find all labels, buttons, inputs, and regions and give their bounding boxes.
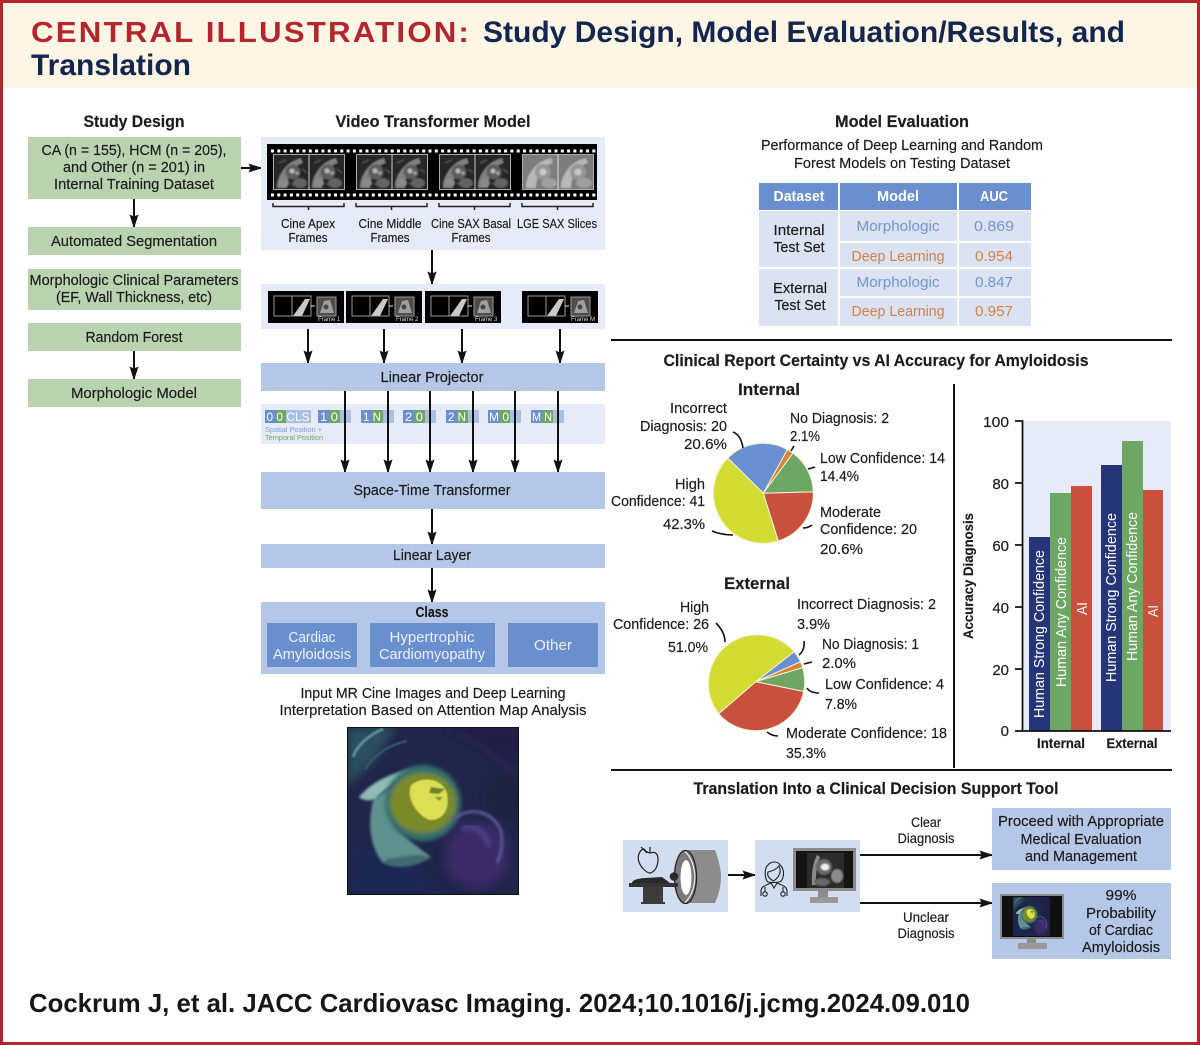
label: clear diagnosis: Clear xyxy=(911,815,941,830)
image: attention map xyxy=(347,727,527,895)
box: morphologic clinical parameters: Morphologic Clinical Parameters xyxy=(30,273,238,289)
heading: model evaluation: Model Evaluation xyxy=(835,112,969,131)
box: random forest: Random Forest xyxy=(86,330,182,346)
pie chart: internal: Low Confidence: 14 xyxy=(820,451,945,467)
bar chart: accuracy diagnosis xyxy=(960,414,1171,751)
pie chart: internal: Internal xyxy=(738,380,800,399)
pie chart: internal: High xyxy=(675,477,705,493)
box: training dataset: Internal Training Dataset xyxy=(54,177,214,193)
title: CENTRAL ILLUSTRATION: xyxy=(31,17,471,49)
pie chart: internal: 42.3% xyxy=(663,517,705,533)
box: probability of cardiac amyloidosis: Probability xyxy=(1086,906,1157,922)
box: morphologic model: Morphologic Model xyxy=(71,386,197,402)
arrow: linear layer to class xyxy=(431,568,433,602)
heading: clinical report certainty: Clinical Report Certainty vs AI Accuracy for Amyloidosis xyxy=(664,351,1088,370)
pie chart: internal: Moderate xyxy=(820,505,881,521)
caption: attention map: Input MR Cine Images and Deep Learning xyxy=(300,686,566,702)
frames panel: Frame M xyxy=(571,317,595,323)
table: AUC: External xyxy=(773,281,827,297)
table: AUC: Test Set xyxy=(774,298,826,314)
panel: study design xyxy=(28,112,241,407)
heading: study design: Study Design xyxy=(84,112,184,131)
subheading: performance xyxy=(761,138,1043,172)
film strip panel: LGE SAX Slices xyxy=(517,217,597,231)
class: cardiac amyloidosis xyxy=(267,623,357,667)
arrows: frames to linear projector xyxy=(308,329,560,363)
table: AUC: 0.954 xyxy=(975,249,1013,265)
position tokens band: M 0 xyxy=(489,410,509,424)
box: morphologic clinical parameters: (EF, Wall Thickness, etc) xyxy=(56,290,212,306)
arrow: MRI to clinician xyxy=(728,874,755,876)
panel: translation xyxy=(623,779,1171,959)
icon: clinician with monitor xyxy=(755,840,860,912)
box: training dataset: and Other (n = 201) in xyxy=(63,160,205,176)
box: probability of cardiac amyloidosis: of Cardiac xyxy=(1089,923,1153,939)
label: unclear diagnosis: Diagnosis xyxy=(898,926,955,941)
class: hypertrophic cardiomyopathy: Hypertrophic xyxy=(390,630,474,646)
arrow: clear diagnosis xyxy=(860,854,992,856)
subheading: performance: Forest Models on Testing Dataset xyxy=(794,156,1010,172)
box: proceed with evaluation xyxy=(992,808,1171,870)
arrow: unclear diagnosis xyxy=(860,902,992,904)
table: AUC: 0.957 xyxy=(975,304,1013,320)
table: AUC: Deep Learning xyxy=(852,304,944,320)
box: proceed with evaluation: Medical Evaluation xyxy=(1020,832,1142,848)
pie chart: external: 7.8% xyxy=(825,697,857,713)
pie chart: external: High xyxy=(680,600,709,616)
bar chart: accuracy diagnosis: 40 xyxy=(992,600,1009,617)
pie chart: internal: 20.6% xyxy=(820,542,863,558)
box: probability of cardiac amyloidosis: 99% xyxy=(1106,888,1137,904)
title: Translation xyxy=(31,49,191,82)
bars: internal: Human Any Confidence xyxy=(1053,537,1070,687)
arrows: projector to transformer xyxy=(345,391,558,472)
bar chart: accuracy diagnosis: External xyxy=(1106,736,1158,751)
film strip panel: Frames xyxy=(370,231,410,245)
pie chart: internal: Confidence: 41 xyxy=(611,494,705,510)
icon: monitor with attention map xyxy=(1000,894,1064,949)
arrow: random forest to model xyxy=(133,351,135,379)
box: automated segmentation xyxy=(28,227,241,255)
table: AUC: Deep Learning xyxy=(852,249,944,265)
box: linear projector: Linear Projector xyxy=(380,370,484,386)
class: hypertrophic cardiomyopathy: Cardiomyopathy xyxy=(379,647,486,663)
position tokens band: Spatial Position + xyxy=(265,427,322,434)
pie chart: internal: 2.1% xyxy=(790,429,820,445)
panel: model evaluation xyxy=(759,112,1043,326)
box: class xyxy=(261,602,605,674)
bar chart: accuracy diagnosis: 100 xyxy=(983,414,1009,431)
table: AUC: 0.847 xyxy=(975,275,1013,291)
arrow: film strip to frames xyxy=(431,250,433,284)
heading: translation: Translation Into a Clinical Decision Support Tool xyxy=(694,779,1058,798)
box: morphologic model xyxy=(28,379,241,407)
bar chart: accuracy diagnosis: 80 xyxy=(992,476,1009,493)
table: AUC xyxy=(759,183,1031,326)
title: Study Design, Model Evaluation/Results, and xyxy=(483,16,1125,49)
pie chart: external: Low Confidence: 4 xyxy=(825,677,944,693)
class: hypertrophic cardiomyopathy xyxy=(370,623,495,667)
box: space-time transformer xyxy=(261,472,605,509)
table: AUC: Dataset xyxy=(774,189,825,205)
table: AUC: Test Set xyxy=(774,240,824,256)
pie chart: external xyxy=(613,574,947,762)
bars: external: Human Any Confidence xyxy=(1124,512,1141,661)
film strip panel: Frames xyxy=(288,231,328,245)
position tokens band: 1 N xyxy=(363,410,381,424)
film strip panel: Cine Apex xyxy=(281,217,336,231)
panel: video transformer model xyxy=(261,112,605,895)
table: AUC: Morphologic xyxy=(856,275,940,291)
pie chart: external: Moderate Confidence: 18 xyxy=(786,726,947,742)
pie chart: external: No Diagnosis: 1 xyxy=(822,637,919,653)
bars: external: AI xyxy=(1145,605,1162,617)
bars: external: Human Strong Confidence xyxy=(1103,513,1120,682)
film strip panel: Cine SAX Basal xyxy=(431,217,511,231)
class: cardiac amyloidosis: Cardiac xyxy=(288,630,336,646)
frames panel xyxy=(261,284,605,329)
position tokens band xyxy=(261,404,605,444)
box: automated segmentation: Automated Segmentation xyxy=(51,234,217,250)
box: probability of cardiac amyloidosis xyxy=(992,883,1171,959)
pie chart: internal: Diagnosis: 20 xyxy=(640,419,727,435)
class: other xyxy=(508,623,598,667)
heading: video transformer model: Video Transformer Model xyxy=(336,112,530,131)
label: clear diagnosis: Diagnosis xyxy=(898,831,955,846)
label: clear diagnosis xyxy=(898,815,955,846)
table: AUC: Internal xyxy=(774,223,824,239)
bars: internal: Human Strong Confidence xyxy=(1031,550,1048,718)
frames panel: Frame 2 xyxy=(396,317,419,323)
table: AUC: Morphologic xyxy=(856,219,940,235)
bars: internal xyxy=(1029,486,1092,731)
title xyxy=(31,16,1125,82)
bar chart: accuracy diagnosis: 20 xyxy=(992,662,1009,679)
pie chart: external: 3.9% xyxy=(797,617,830,633)
box: class: Class xyxy=(416,605,448,621)
arrow: dataset to segmentation xyxy=(133,199,135,227)
citation footer: Cockrum J, et al. JACC Cardiovasc Imaging. 2024;10.1016/j.jcmg.2024.09.010 xyxy=(29,988,970,1018)
label: unclear diagnosis xyxy=(898,910,955,941)
pie chart: internal: Confidence: 20 xyxy=(820,522,917,538)
icon: MRI scanner xyxy=(623,840,728,912)
film strip panel: Cine Middle xyxy=(358,217,422,231)
box: linear layer xyxy=(261,544,605,568)
box: training dataset xyxy=(28,137,241,199)
pie chart: external: 2.0% xyxy=(822,656,856,672)
frames panel: Frame 1 xyxy=(318,317,341,323)
pie chart: external: Confidence: 26 xyxy=(613,617,709,633)
header band xyxy=(3,3,1197,88)
position tokens band: Temporal Position xyxy=(265,435,323,442)
bar chart: accuracy diagnosis: 60 xyxy=(992,538,1009,555)
label: unclear diagnosis: Unclear xyxy=(903,910,949,925)
box: proceed with evaluation: Proceed with Appropriate xyxy=(998,814,1164,830)
position tokens band: M N xyxy=(532,410,552,424)
bar chart: accuracy diagnosis: 0 xyxy=(1001,723,1009,740)
token: CLS: 0 0 CLS xyxy=(266,410,310,424)
frames panel: Frame 3 xyxy=(475,317,498,323)
box: proceed with evaluation: and Management xyxy=(1025,849,1137,865)
pie chart: external: Incorrect Diagnosis: 2 xyxy=(797,597,936,613)
film strip panel xyxy=(261,137,605,250)
position tokens band: 1 0 xyxy=(320,410,338,424)
arrow: transformer to linear layer xyxy=(431,509,433,544)
box: linear projector xyxy=(261,363,605,391)
pie chart: external: External xyxy=(724,574,790,593)
film strip panel: Frames xyxy=(452,231,490,245)
pie chart: external: 51.0% xyxy=(668,640,708,656)
table: AUC: 0.869 xyxy=(974,219,1014,235)
box: random forest xyxy=(28,323,241,351)
pie chart: internal: No Diagnosis: 2 xyxy=(790,411,889,427)
box: morphologic clinical parameters xyxy=(28,269,241,310)
position tokens band: 2 N xyxy=(448,410,466,424)
position tokens band: 2 0 xyxy=(405,410,423,424)
class: other: Other xyxy=(534,638,572,654)
class: cardiac amyloidosis: Amyloidosis xyxy=(273,647,351,663)
caption: attention map: Interpretation Based on Attention Map Analysis xyxy=(280,703,586,719)
bars: external xyxy=(1101,441,1163,731)
box: training dataset: CA (n = 155), HCM (n = 205), xyxy=(42,143,226,159)
pie chart: internal: 20.6% xyxy=(684,437,727,453)
table: AUC: AUC xyxy=(980,189,1008,205)
bar chart: accuracy diagnosis: Accuracy Diagnosis xyxy=(960,513,976,639)
pie chart: internal: 14.4% xyxy=(820,469,859,485)
box: probability of cardiac amyloidosis: Amyloidosis xyxy=(1082,940,1160,956)
pie chart: internal: Incorrect xyxy=(670,401,727,417)
pie chart: internal xyxy=(611,380,945,558)
bar chart: accuracy diagnosis: Internal xyxy=(1037,736,1085,751)
table: AUC: Model xyxy=(877,189,919,205)
box: linear layer: Linear Layer xyxy=(393,548,471,564)
box: space-time transformer: Space-Time Transformer xyxy=(354,483,511,499)
caption: attention map xyxy=(280,686,586,719)
bars: internal: AI xyxy=(1074,602,1091,615)
pie chart: external: 35.3% xyxy=(786,746,826,762)
subheading: performance: Performance of Deep Learning and Random xyxy=(761,138,1043,154)
arrow: study design to video transformer xyxy=(241,167,261,169)
